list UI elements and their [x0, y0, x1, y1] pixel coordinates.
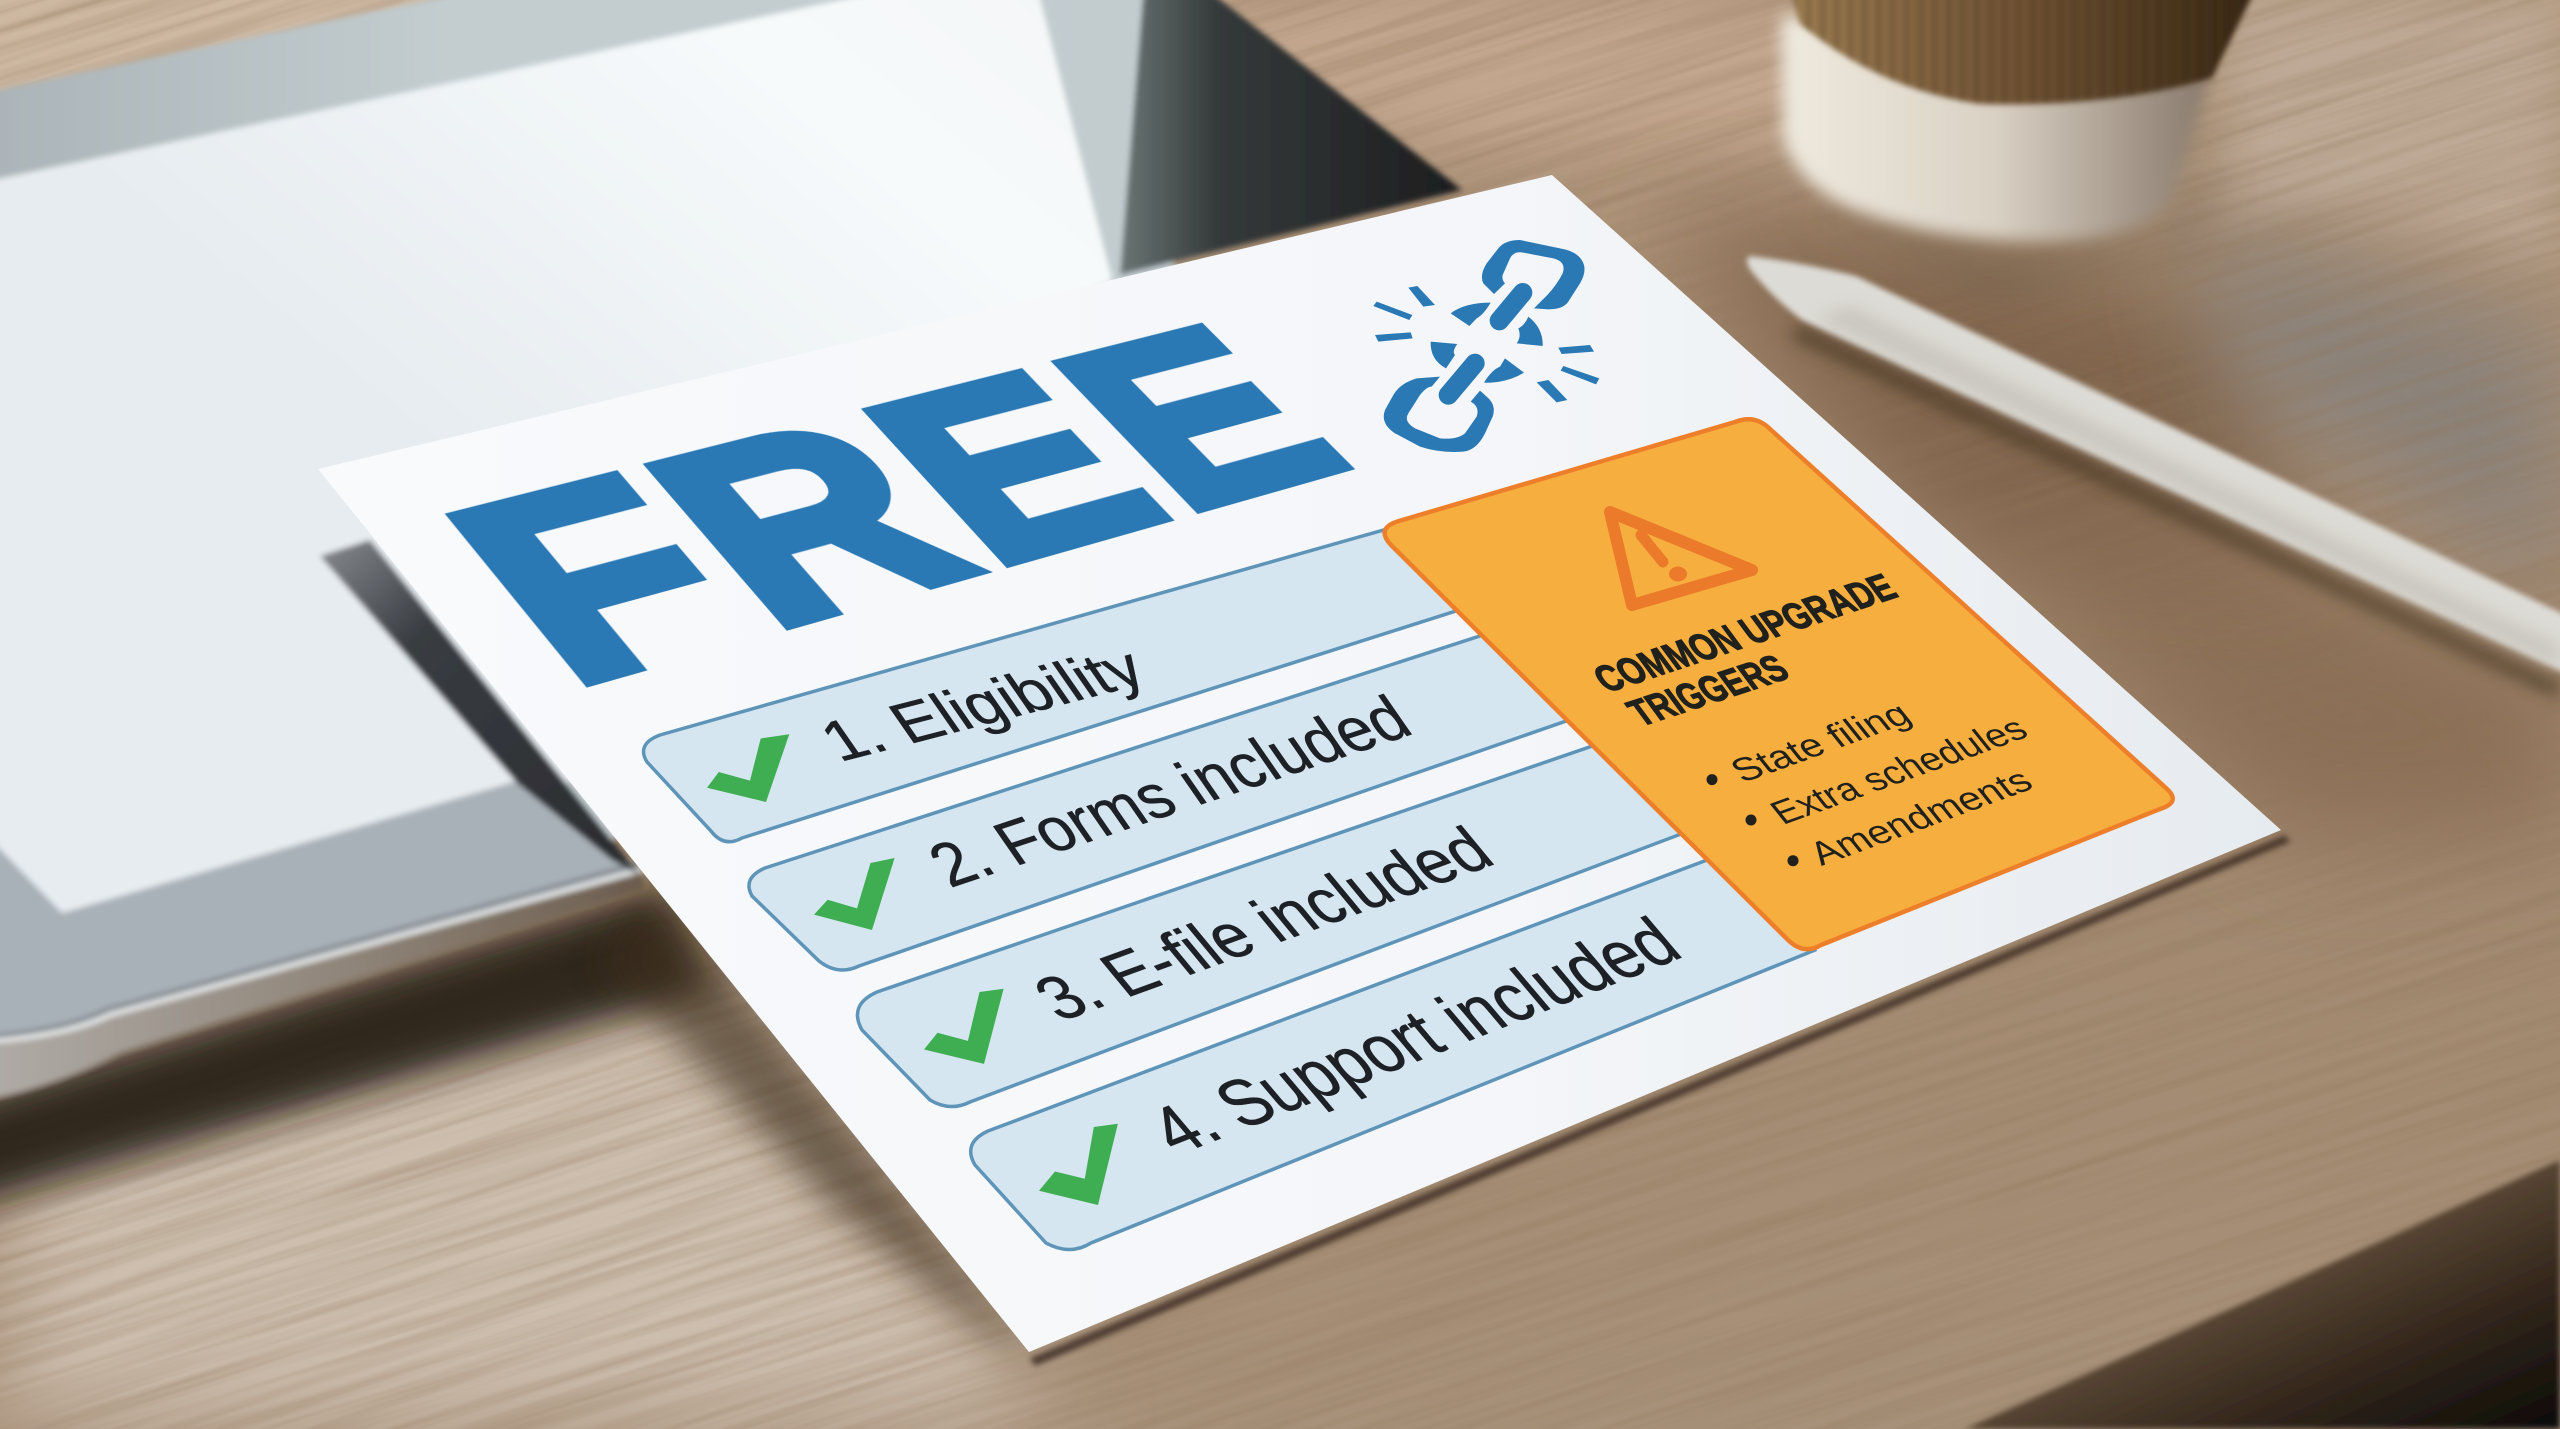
- callout bullet list: Amendments: [1801, 762, 2041, 873]
- paper shadow on desk: [600, 835, 2290, 1366]
- icon: warning triangle: [1610, 512, 1752, 605]
- check mark 2: [814, 858, 895, 930]
- row 3 box: e-file: [857, 709, 1750, 1107]
- cup sleeve: [1785, 0, 2265, 104]
- panel: checklist rows: [644, 497, 1815, 1250]
- callout bullet list: State filing: [1723, 696, 1919, 790]
- row 1 box: eligibility: [644, 497, 1500, 842]
- row 4 box: support: [971, 825, 1815, 1250]
- check mark 1: [707, 734, 789, 802]
- callout bullet list: [1706, 696, 2041, 873]
- row 2 box: forms: [749, 597, 1650, 970]
- label: 3. E-file included: 3. E-file included: [1020, 814, 1508, 1034]
- title: FREE: FREE: [394, 281, 1406, 739]
- desk: dark front edge: [1965, 1160, 2560, 1429]
- callout bullet list: Extra schedules: [1762, 709, 2035, 831]
- callout heading: TRIGGERS: [1619, 647, 1797, 734]
- label: 2. Forms included: 2. Forms included: [915, 682, 1424, 900]
- check mark 3: [924, 989, 1004, 1064]
- stylus pen: [1747, 256, 2560, 700]
- check mark 4: [1039, 1124, 1118, 1205]
- panel: printed card: [318, 175, 2281, 1352]
- tablet: [0, 0, 1462, 1232]
- label: 1. Eligibility: 1. Eligibility: [807, 634, 1158, 773]
- panel: common upgrade triggers callout: [1385, 419, 2173, 949]
- callout heading: COMMON UPGRADE: [1585, 566, 1905, 700]
- label: 4. Support included: 4. Support included: [1133, 904, 1696, 1168]
- coffee cup: [1781, 0, 2265, 290]
- icon: broken chain link: [1373, 240, 1599, 452]
